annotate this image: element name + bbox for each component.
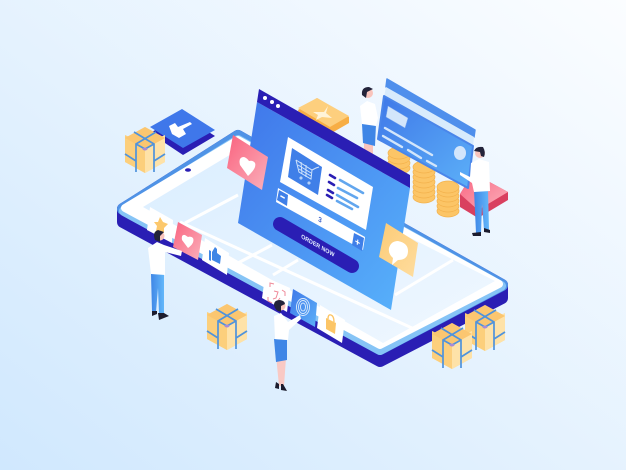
product image xyxy=(288,148,322,195)
product card xyxy=(280,137,373,230)
phone dark side xyxy=(123,136,502,361)
box: bottom centre xyxy=(207,304,247,350)
edge tile: face scan xyxy=(262,277,290,312)
person: woman at bottom xyxy=(274,300,301,391)
coin stacks xyxy=(388,147,508,218)
card top strip xyxy=(386,79,475,137)
screen layout lines xyxy=(180,195,453,328)
quantity selector: + xyxy=(354,236,361,250)
card text lines xyxy=(383,128,436,166)
edge tile: fingerprint xyxy=(290,289,317,327)
card chip xyxy=(386,106,408,128)
minus button xyxy=(277,190,288,206)
order now button: ORDER NOW xyxy=(301,234,335,259)
window control dots xyxy=(263,96,280,108)
camera dot xyxy=(185,168,191,172)
order now button xyxy=(280,224,352,266)
coin stack 3 xyxy=(437,181,459,217)
person: woman behind window xyxy=(360,87,378,157)
quantity value: 3 xyxy=(318,216,322,225)
phone screen xyxy=(143,150,495,343)
product details list xyxy=(327,175,363,209)
box: bottom right rear xyxy=(465,305,505,351)
phone white surface xyxy=(125,140,499,345)
coin stack 1 xyxy=(388,147,410,174)
speech bubble tile xyxy=(379,223,418,277)
card circle xyxy=(454,146,466,160)
star tile xyxy=(298,98,349,134)
red platform xyxy=(460,173,508,218)
box: bottom right front xyxy=(432,323,472,369)
plus button xyxy=(352,233,364,251)
credit card xyxy=(378,79,475,188)
quantity selector xyxy=(276,188,365,251)
heart tile xyxy=(227,135,268,190)
edge tile: star xyxy=(147,207,173,243)
coin stack 2 xyxy=(413,161,435,203)
icon: like tile xyxy=(150,109,215,155)
browser window xyxy=(238,89,410,310)
edge tile: heart xyxy=(173,222,202,260)
edge tile: lock xyxy=(317,305,345,343)
box: top left xyxy=(125,127,165,173)
window title bar xyxy=(257,89,410,188)
phone body xyxy=(123,136,502,361)
person: man at left xyxy=(148,230,182,320)
person: man at card xyxy=(460,147,490,236)
edge tile: thumbs up xyxy=(202,238,229,275)
card main body xyxy=(378,96,473,188)
card light band xyxy=(384,87,474,147)
window body xyxy=(238,102,410,310)
icon: shopping cart xyxy=(296,160,319,184)
phone blue outline xyxy=(123,136,502,349)
phone light blue rim xyxy=(124,140,501,350)
